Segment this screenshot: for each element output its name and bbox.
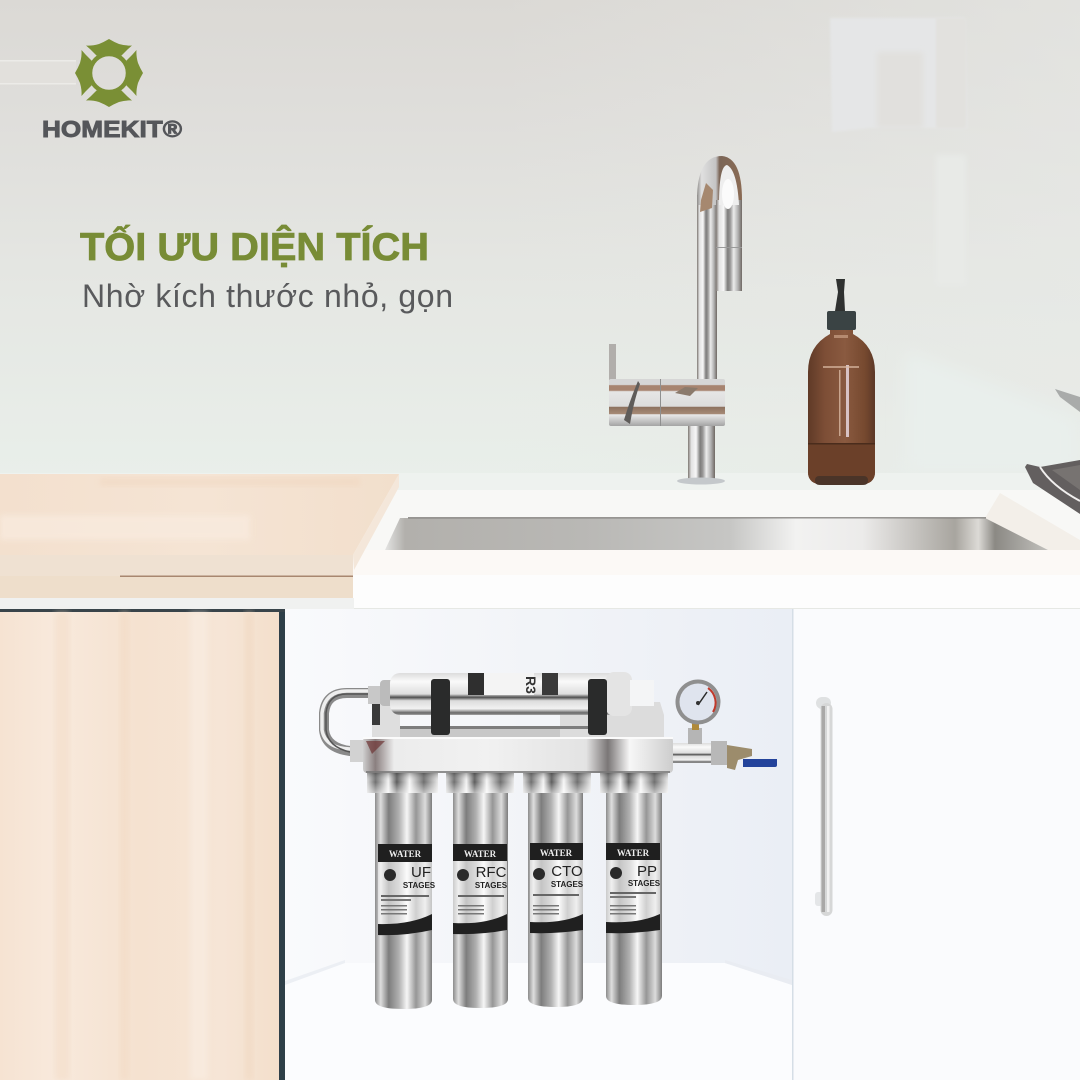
sink right slope [985,493,1080,550]
counter towel and utensil [1025,389,1080,514]
back plate [375,728,663,737]
canister: CTO: CTO [551,863,583,880]
wall backsplash [0,0,1080,480]
faucet [609,156,742,484]
canister: PP [600,773,668,1005]
canister: RFC: RFC [476,864,507,881]
canister: UF [367,773,438,1009]
lever [609,344,616,380]
brand name: HOMEKIT® [42,116,182,142]
spout [697,156,742,205]
door handle [815,697,832,916]
sink basin [385,518,1048,550]
wooden cabinet door [0,609,285,1080]
canister: UF: UF [411,864,431,881]
right white cabinet door [794,609,1080,1080]
outlet valve and handle [673,722,777,770]
mounting clips [431,679,450,735]
canister: UF: WATER [389,849,422,859]
open cabinet interior [285,609,794,1080]
pressure gauge [676,680,720,724]
canister: RFC: STAGES [475,881,508,890]
canister: PP: WATER [617,848,650,858]
canister: PP: PP [637,863,657,880]
mixer body [609,379,725,426]
base [688,424,715,480]
stage label: R3 [523,676,539,694]
manifold bar [363,737,673,773]
subtitle: Nhờ kích thước nhỏ, gọn [82,278,453,314]
riser [697,195,717,382]
loop pipe [324,693,370,751]
title: TỐI ƯU DIỆN TÍCH [80,224,429,269]
countertop and sink [0,473,1080,609]
wooden board [0,474,399,598]
canister: CTO: WATER [540,848,573,858]
canister: UF: STAGES [403,881,436,890]
top filter tube: R3 [380,672,654,716]
water filter system [322,672,777,1009]
canister: RFC: WATER [464,849,497,859]
canister: CTO: STAGES [551,880,584,889]
canister: PP: STAGES [628,879,661,888]
canister: CTO [523,773,591,1007]
logo: Homekit [42,39,182,142]
icon: cross ring emblem [75,39,143,107]
soap bottle [808,279,875,485]
canister: RFC [446,773,514,1008]
